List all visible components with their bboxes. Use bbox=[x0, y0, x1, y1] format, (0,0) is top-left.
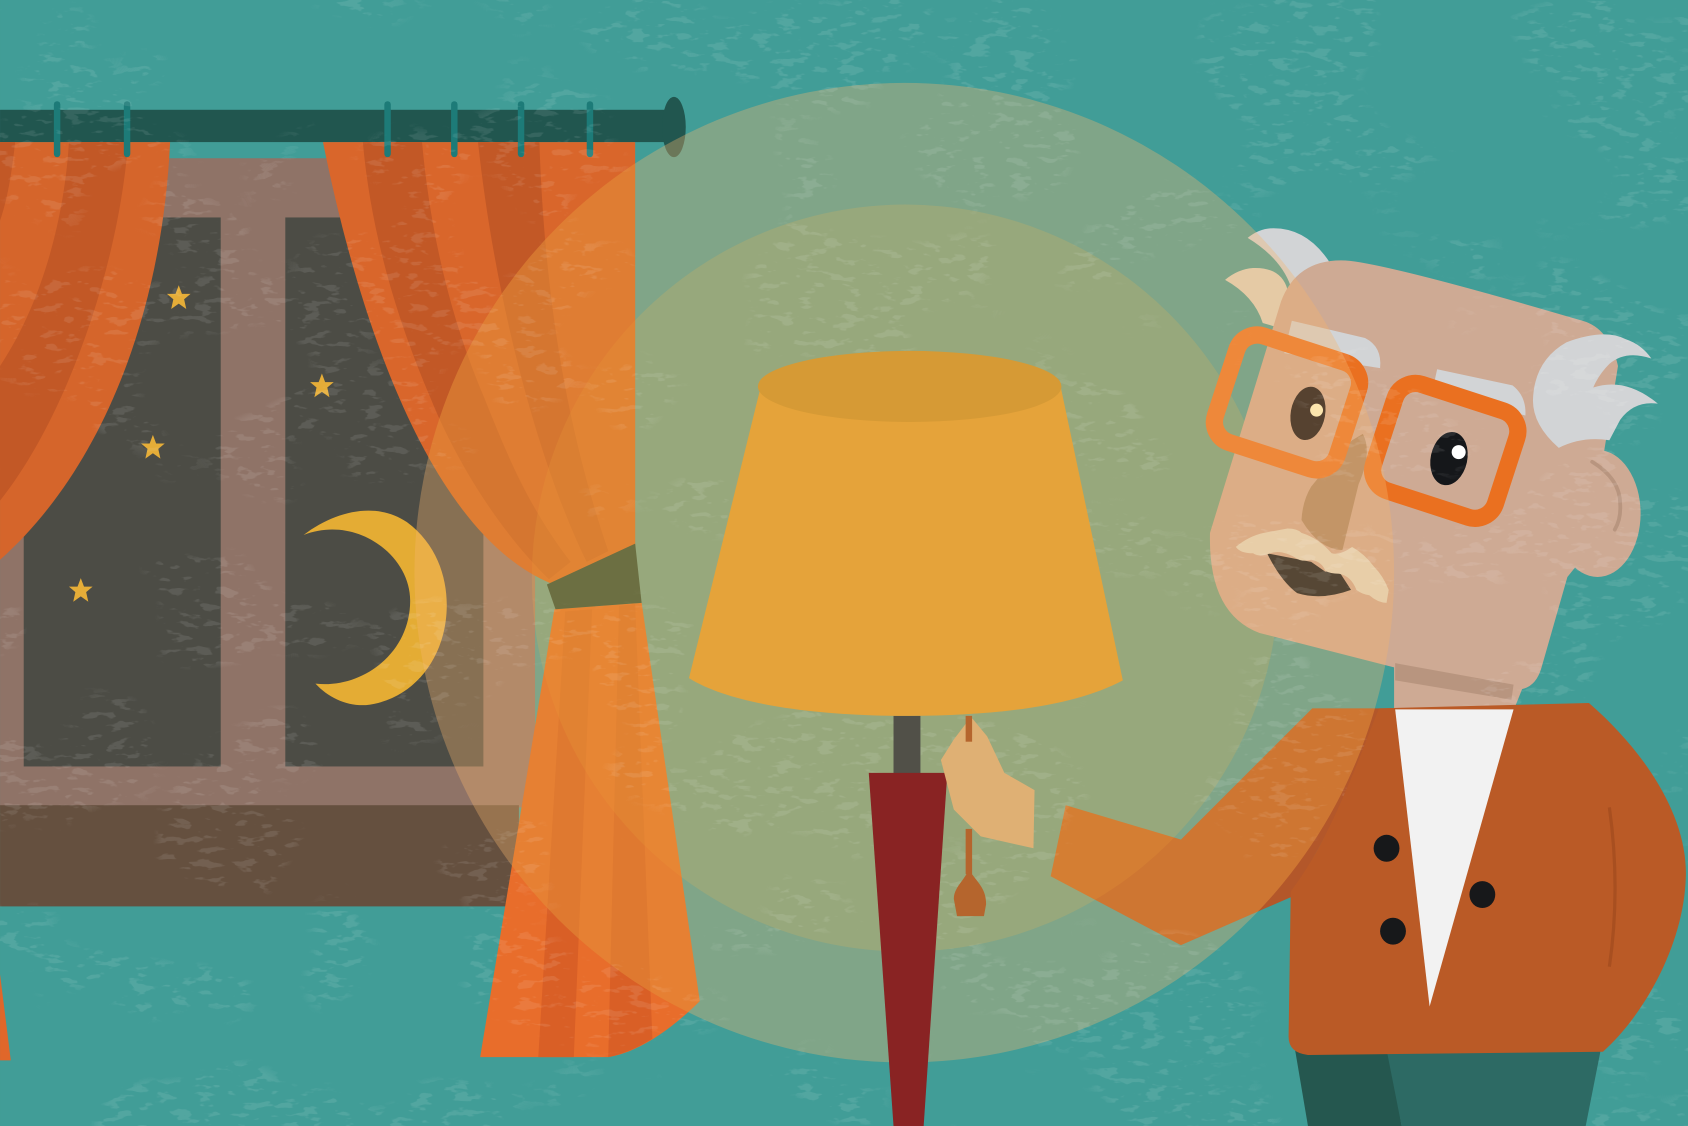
lamp bbox=[689, 351, 1123, 1126]
lamp shade top bbox=[758, 351, 1061, 422]
ear inner line bbox=[1592, 462, 1620, 530]
lamp shade bbox=[689, 385, 1123, 716]
glasses bbox=[1209, 329, 1523, 524]
right curtain bbox=[323, 142, 700, 1057]
lamp stem bbox=[894, 716, 920, 775]
nose bbox=[1302, 434, 1367, 550]
outer lamp glow bbox=[414, 83, 1394, 1062]
curtain tie bbox=[547, 544, 642, 609]
right window pane bbox=[285, 217, 483, 766]
curtain rod rings bbox=[54, 101, 593, 157]
shirt front bbox=[1395, 709, 1514, 1007]
curtain stub bottom left bbox=[0, 974, 11, 1060]
mouth bbox=[1267, 553, 1351, 596]
window bbox=[0, 158, 535, 906]
man: sleeve bbox=[1051, 708, 1395, 945]
right eyebrow bbox=[1432, 369, 1525, 416]
jacket buttons bbox=[1374, 835, 1495, 945]
man: jacket bbox=[1289, 703, 1686, 1055]
glow shading on curtain and sleeve bbox=[428, 164, 1374, 1012]
left curtain bbox=[0, 142, 170, 560]
left window pane bbox=[24, 217, 221, 766]
man: head bbox=[1209, 228, 1658, 710]
right eye bbox=[1425, 428, 1472, 489]
moustache bbox=[1236, 529, 1389, 603]
curtain rod bbox=[0, 97, 686, 157]
crescent moon bbox=[304, 511, 447, 705]
hand holding pull cord bbox=[941, 716, 1035, 916]
man: trousers bbox=[1295, 1050, 1601, 1126]
ear bbox=[1554, 450, 1641, 577]
left eye bbox=[1286, 384, 1330, 443]
cord tassel bbox=[954, 870, 986, 916]
face bbox=[1210, 260, 1618, 690]
pull cord bbox=[954, 716, 986, 916]
right hair bbox=[1533, 334, 1658, 448]
stars bbox=[69, 285, 334, 602]
inner lamp glow bbox=[532, 205, 1279, 952]
left eyebrow bbox=[1284, 321, 1380, 368]
hair tufts bbox=[1248, 228, 1331, 286]
neck bbox=[1394, 646, 1539, 710]
neck shadow bbox=[1395, 663, 1514, 700]
lamp base bbox=[869, 773, 947, 1126]
jacket seam bbox=[1609, 807, 1615, 967]
